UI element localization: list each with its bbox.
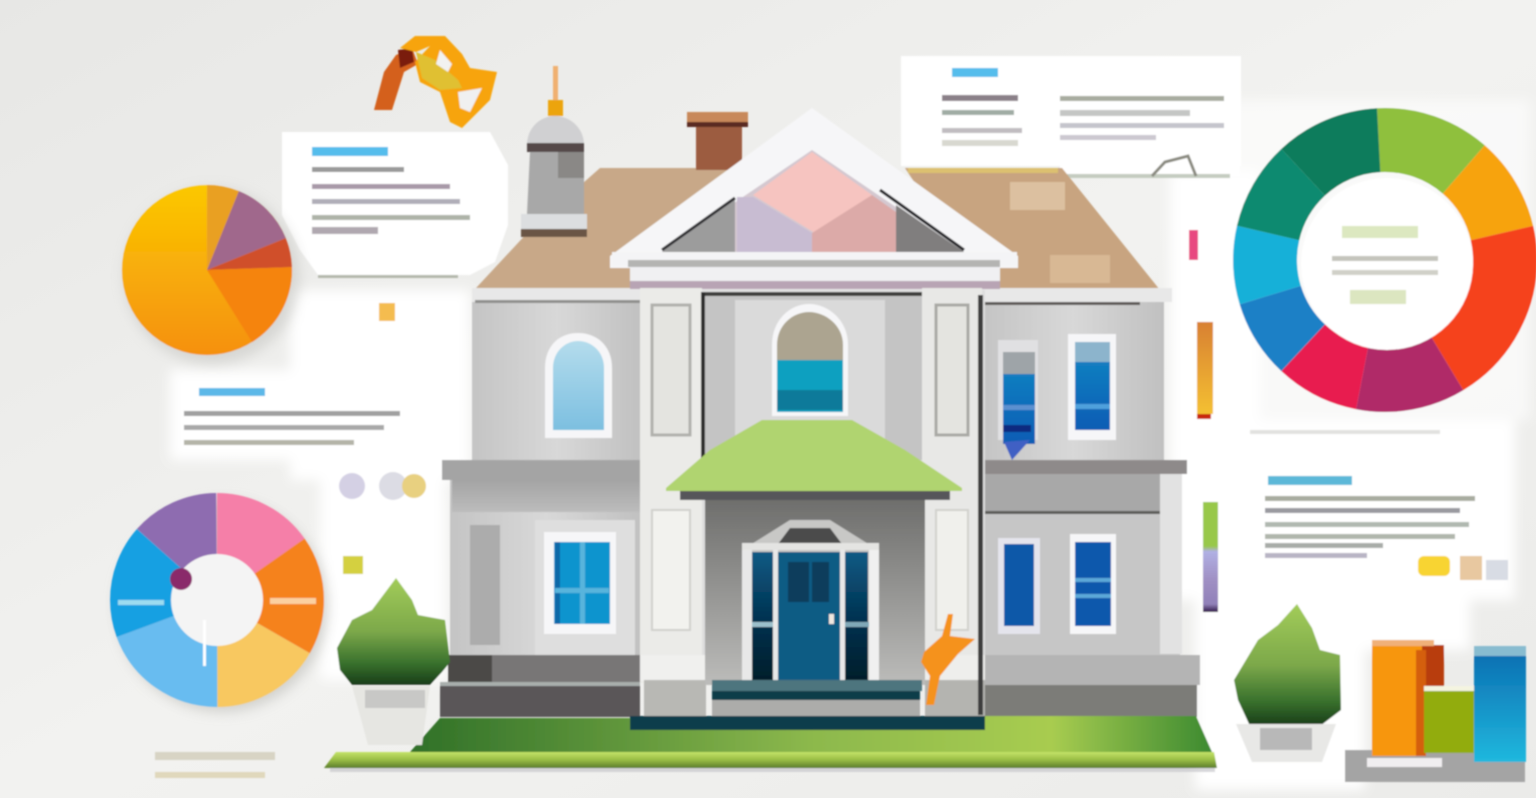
entrance recess (705, 495, 925, 685)
entablature (612, 252, 1017, 289)
donut chart: right (1259, 134, 1511, 386)
window: lower right pair (998, 534, 1116, 634)
marker: small yellow square (379, 303, 395, 321)
roof: right slope (905, 168, 1160, 290)
window: upper left arched (545, 333, 612, 438)
entrance door (742, 520, 879, 684)
icon: orange flag at porch (921, 614, 975, 705)
bar icon: vertical green and purple (1203, 502, 1218, 612)
panel: lower-right note (1250, 430, 1508, 580)
left wing, upper floor (472, 290, 642, 460)
pie chart: upper left (122, 185, 300, 364)
window: upper right pair (998, 334, 1116, 444)
roof trim strip (472, 288, 1172, 305)
chimney (687, 112, 748, 170)
panel: middle-left note (184, 388, 400, 445)
planter: left (337, 578, 450, 745)
green porch canopy (666, 420, 962, 500)
marker: blue tick (1004, 440, 1030, 460)
roof: left slope (476, 168, 740, 288)
pediment (610, 108, 1018, 268)
small icons: left cluster (339, 472, 426, 574)
bar icon: vertical orange (1197, 322, 1213, 419)
front steps (630, 716, 985, 730)
bell tower (521, 66, 587, 237)
right wing, lower floor (982, 460, 1187, 658)
centre bay (640, 290, 985, 660)
donut chart: lower left (116, 500, 328, 712)
house (440, 66, 1200, 730)
window: top centre arched (772, 304, 848, 416)
panel: upper-left note (282, 132, 508, 278)
marker: pink tag (1189, 230, 1198, 260)
panel: upper-right note (901, 56, 1241, 178)
left wing, lower floor (442, 460, 642, 660)
white backdrop glows behind the charts and notes (170, 100, 1530, 790)
right wing, upper floor (982, 290, 1164, 462)
column: right (915, 288, 991, 716)
icon: ribbon top (374, 36, 497, 128)
foundation (440, 655, 1200, 717)
bar chart: bottom right (1345, 640, 1526, 782)
window: lower left (544, 532, 616, 634)
caption: bottom left (155, 752, 275, 778)
column: left (634, 288, 710, 716)
planter: right (1234, 604, 1341, 762)
lawn (324, 716, 1217, 772)
